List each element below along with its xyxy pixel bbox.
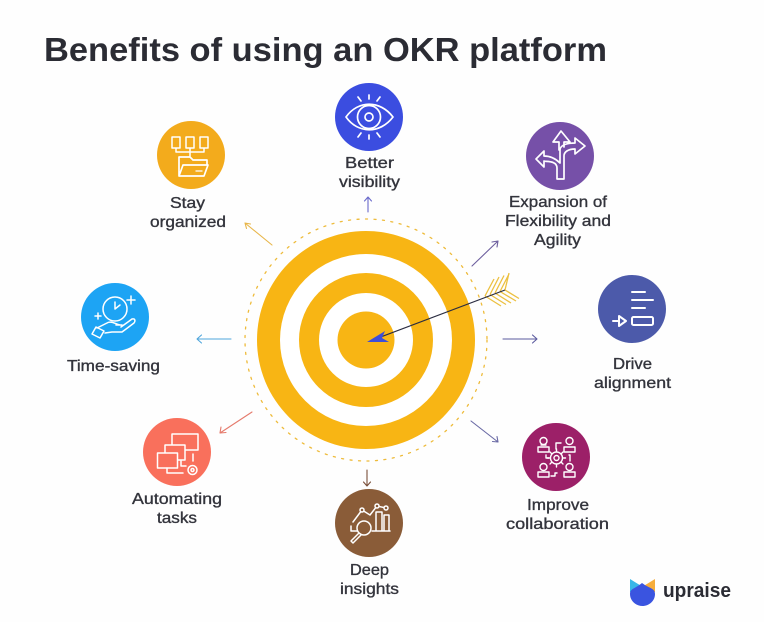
label: Improve collaboration: collaboration xyxy=(506,516,609,533)
label: Drive alignment: alignment xyxy=(594,375,672,392)
label: Expansion of Flexibility and Agility: Flexibility and xyxy=(505,213,611,230)
item: Drive alignment xyxy=(594,275,672,392)
label: Automating tasks: Automating xyxy=(132,491,222,508)
label: Expansion of Flexibility and Agility xyxy=(505,194,611,249)
label: Deep insights: insights xyxy=(340,581,399,598)
item: Stay organized xyxy=(150,121,226,231)
icon: windows and gear xyxy=(143,418,211,486)
title: Benefits of using an OKR platform xyxy=(44,31,607,68)
item: Better visibility xyxy=(335,83,403,191)
wordmark: upraise xyxy=(663,580,731,602)
label: Drive alignment: Drive xyxy=(613,356,652,373)
label: Time-saving: Time-saving xyxy=(67,358,160,375)
icon: alignment bars xyxy=(598,275,666,343)
label: Improve collaboration: Improve xyxy=(527,497,589,514)
label: Deep insights: Deep xyxy=(350,562,389,579)
item: Expansion of Flexibility and Agility xyxy=(505,122,611,249)
label: Expansion of Flexibility and Agility: Agility xyxy=(534,232,581,249)
item: Deep insights xyxy=(335,489,403,598)
icon: folder with documents xyxy=(157,121,225,189)
label: Deep insights xyxy=(340,562,399,598)
icon: upraise cat mark xyxy=(630,579,655,606)
icon: eye xyxy=(335,83,403,151)
item: Time-saving xyxy=(67,283,160,375)
label: Automating tasks: tasks xyxy=(157,510,197,527)
label: Drive alignment xyxy=(594,356,672,392)
label: Stay organized: organized xyxy=(150,214,226,231)
item: Automating tasks xyxy=(132,418,222,527)
label: Better visibility: visibility xyxy=(339,174,400,191)
upraise logo xyxy=(630,579,731,606)
icon: magnifier and chart xyxy=(335,489,403,557)
label: Better visibility: Better xyxy=(345,155,395,172)
label: Better visibility xyxy=(339,155,400,191)
label: Improve collaboration xyxy=(506,497,609,533)
icon: people around a gear xyxy=(522,423,590,491)
label: Stay organized: Stay xyxy=(170,195,205,212)
icon: clock above a hand xyxy=(81,283,149,351)
label: Expansion of Flexibility and Agility: Expansion of xyxy=(509,194,608,211)
direction arrows xyxy=(197,197,537,486)
icon: branching arrows xyxy=(526,122,594,190)
label: Stay organized xyxy=(150,195,226,231)
label: Automating tasks xyxy=(132,491,222,527)
item: Improve collaboration xyxy=(506,423,609,533)
icon: arrow in target xyxy=(367,273,519,342)
central target with arrow xyxy=(245,219,519,461)
